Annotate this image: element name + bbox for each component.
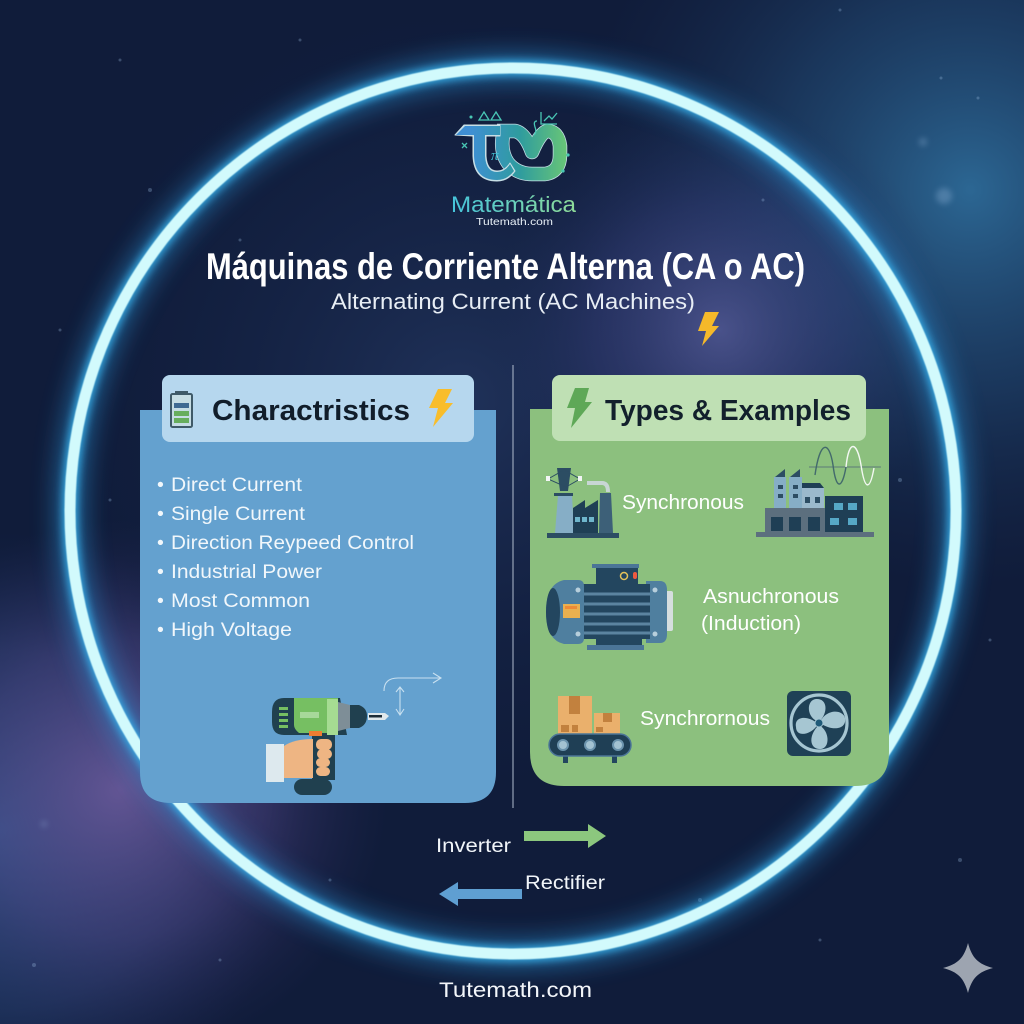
bullet list: • bbox=[157, 532, 164, 554]
subtitle: Alternating Current (AC Machines) bbox=[331, 289, 695, 314]
bullet list: High Voltage bbox=[171, 619, 292, 641]
icon: ventilation fan bbox=[787, 691, 851, 756]
label: Asnuchronous (Induction) bbox=[701, 586, 839, 635]
panel body bbox=[140, 410, 496, 803]
inverter label: Inverter bbox=[436, 836, 512, 857]
logo mark: TM ribbon: π bbox=[491, 148, 499, 164]
bullet list: • bbox=[157, 503, 164, 525]
arrow: rectifier bbox=[439, 873, 606, 906]
logo wordmark: Matemática bbox=[451, 192, 577, 217]
label: Synchrornous: Synchrornous bbox=[640, 708, 770, 730]
bullet list: • bbox=[157, 561, 164, 583]
logo: Tutemath bbox=[451, 112, 577, 228]
icon: power plant bbox=[546, 468, 619, 538]
panel header bbox=[552, 375, 866, 441]
icon: electric motor bbox=[546, 564, 673, 650]
footer url: Tutemath.com bbox=[439, 979, 592, 1002]
heading: Charactristics: Charactristics bbox=[212, 395, 410, 427]
logo url: Tutemath.com bbox=[476, 216, 553, 228]
bullet list: • bbox=[157, 619, 164, 641]
arrow: inverter bbox=[436, 824, 606, 857]
bullet list: • bbox=[157, 474, 164, 496]
label: Synchronous: Synchronous bbox=[622, 492, 744, 514]
bullet list: Industrial Power bbox=[171, 561, 323, 583]
icon: battery bbox=[171, 391, 192, 427]
bullet list: Direct Current bbox=[171, 474, 303, 496]
icon: lightning bolt bbox=[429, 389, 453, 427]
inverter arrow bbox=[524, 824, 606, 848]
icon: four-point sparkle bbox=[943, 943, 993, 993]
icon: lightning bolt under title bbox=[698, 312, 719, 346]
panel header bbox=[162, 375, 474, 442]
bullet list: Most Common bbox=[171, 590, 310, 612]
bullet list: Direction Reypeed Control bbox=[171, 532, 414, 554]
rectifier label: Rectifier bbox=[525, 873, 606, 894]
icon: green lightning bolt bbox=[567, 388, 592, 428]
icon: direction arrows bbox=[384, 673, 441, 715]
label: Asnuchronous (Induction): (Induction) bbox=[701, 613, 801, 635]
central divider bbox=[512, 365, 514, 808]
logo: maths symbols bbox=[462, 112, 569, 172]
glowing circular ring bbox=[70, 68, 956, 954]
bullet list: Single Current bbox=[171, 503, 306, 525]
bullet list bbox=[157, 474, 414, 641]
icon: factory with AC waves bbox=[756, 446, 881, 537]
icon: hand-held drill bbox=[266, 698, 389, 795]
title: Máquinas de Corriente Alterna (CA o AC) bbox=[206, 246, 805, 287]
heading: Types & Examples: Types & Examples bbox=[605, 395, 851, 427]
panel: characteristics bbox=[140, 375, 496, 803]
bullet list: • bbox=[157, 590, 164, 612]
panel body bbox=[530, 409, 889, 786]
icon: conveyor belt with boxes bbox=[549, 696, 631, 763]
label: Asnuchronous (Induction): Asnuchronous bbox=[703, 586, 839, 608]
panel: types and examples bbox=[530, 375, 889, 786]
rectifier arrow bbox=[439, 882, 522, 906]
